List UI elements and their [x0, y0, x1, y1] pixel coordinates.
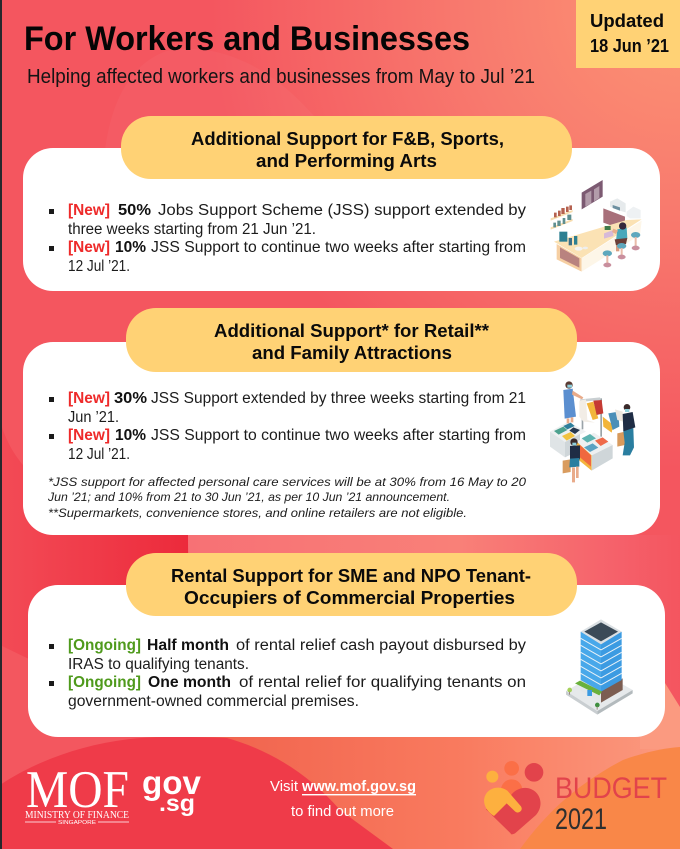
logo: Budget 2021	[484, 761, 667, 836]
icon: cafe counter	[551, 180, 642, 272]
footnotes	[47, 475, 526, 520]
bullet list: retail: Jun ’21.	[68, 409, 119, 426]
bullet list: retail: JSS Support extended by three weeks starting from 21	[151, 390, 526, 407]
logo: gov.sg: gov	[142, 764, 202, 801]
logo: Ministry of Finance: MOF	[26, 761, 129, 819]
icon: office tower	[566, 619, 633, 715]
bullet list: rental	[49, 637, 526, 710]
bullet list: F&B: Jobs Support Scheme (JSS) support extended by	[158, 202, 526, 219]
bullet list: F&B: 12 Jul ’21.	[68, 258, 130, 275]
bullet list: rental: [Ongoing]	[68, 637, 141, 654]
bullet list: retail: [New]	[68, 427, 110, 444]
bullet list: rental: [Ongoing]	[68, 674, 141, 691]
bullet list: F&B: [New]	[68, 239, 110, 256]
panel: retail and family attractions	[23, 308, 660, 535]
heading: rental: Occupiers of Commercial Properties	[184, 588, 515, 608]
panel: rental support	[28, 553, 665, 737]
bullet list: retail: 12 Jul ’21.	[68, 446, 130, 463]
bullet list: F&B: 10%	[115, 239, 146, 256]
bullet list: retail	[49, 390, 526, 463]
heading: rental	[171, 566, 531, 608]
logo: Ministry of Finance: SINGAPORE	[58, 820, 96, 826]
logo: Budget 2021: 2021	[555, 803, 607, 836]
call to action: Visit	[270, 778, 299, 795]
bullet list: rental: One month	[148, 674, 231, 691]
heading: F&B: and Performing Arts	[256, 151, 437, 171]
heading: retail	[214, 321, 489, 363]
bullet list: F&B: 50%	[118, 202, 151, 219]
bullet list: rental: government-owned commercial premises.	[68, 693, 359, 710]
heading: retail: Additional Support* for Retail**	[214, 321, 489, 341]
icon: heart with people	[484, 761, 543, 834]
bullet list: rental: Half month	[147, 637, 229, 654]
bullet list: F&B: three weeks starting from 21 Jun ’21.	[68, 221, 316, 238]
call to action	[270, 778, 416, 820]
heading: retail: and Family Attractions	[252, 343, 452, 363]
heading: F&B: Additional Support for F&B, Sports,	[191, 129, 504, 149]
updated badge: Updated	[590, 11, 664, 31]
logo: Budget 2021: BUDGET	[555, 772, 667, 805]
heading: F&B	[191, 129, 504, 171]
call to action: to find out more	[291, 803, 394, 820]
logo: gov.sg: .sg	[159, 790, 195, 816]
bullet list: rental: of rental relief for qualifying tenants on	[239, 674, 526, 691]
updated badge	[576, 0, 680, 68]
title: For Workers and Businesses	[24, 20, 470, 58]
bullet list: retail: 10%	[115, 427, 146, 444]
bullet list: F&B	[49, 202, 526, 275]
bullet list: F&B: JSS Support to continue two weeks after starting from	[151, 239, 526, 256]
footnotes: *JSS support for affected personal care services will be at 30% from 16 May to 20	[48, 475, 526, 489]
bullet list: F&B: [New]	[68, 202, 110, 219]
bullet list: retail: 30%	[114, 390, 147, 407]
subtitle: Helping affected workers and businesses from May to Jul ’21	[27, 66, 535, 88]
icon: masked shoppers at clothes racks	[550, 381, 635, 482]
heading: rental: Rental Support for SME and NPO Tenant-	[171, 566, 531, 586]
panel: F&B, sports and performing arts	[23, 116, 660, 291]
footnotes: Jun ’21; and 10% from 21 to 30 Jun ’21, as per 10 Jun ’21 announcement.	[47, 490, 450, 504]
logo: gov.sg	[142, 764, 202, 816]
bullet list: retail: [New]	[68, 390, 110, 407]
call to action: www.mof.gov.sg	[301, 778, 416, 795]
bullet list: rental: IRAS to qualifying tenants.	[68, 656, 249, 673]
footnotes: **Supermarkets, convenience stores, and online retailers are not eligible.	[48, 506, 467, 520]
bullet list: retail: JSS Support to continue two weeks after starting from	[151, 427, 526, 444]
logo: Ministry of Finance: MINISTRY OF FINANCE	[25, 810, 129, 821]
bullet list: rental: of rental relief cash payout disbursed by	[236, 637, 526, 654]
updated badge: 18 Jun ’21	[590, 36, 669, 56]
